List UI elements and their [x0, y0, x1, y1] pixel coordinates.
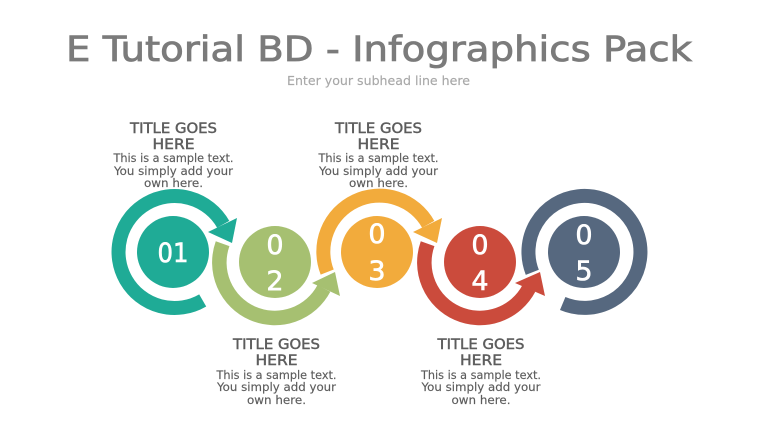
text block: step 4: This is a sample text. [420, 368, 541, 382]
step 5: slate ring and number: 5 [575, 256, 593, 287]
text block: step 1: own here. [144, 176, 203, 190]
text block: step 3: HERE [358, 137, 400, 153]
text block: step 4: HERE [460, 353, 502, 369]
text block: step 3: You simply add your [318, 164, 438, 178]
subhead: Enter your subhead line here [287, 73, 470, 88]
text block: step 3: own here. [349, 176, 408, 190]
step 4: red ring arrow and number: 0 [471, 230, 489, 261]
text block: step 2: own here. [247, 393, 306, 407]
text block: step 3 [318, 121, 438, 190]
text block: step 1: This is a sample text. [113, 151, 234, 165]
text block: step 1: HERE [152, 137, 194, 153]
step 3: orange ring arrow and number: 0 [368, 219, 386, 250]
text block: step 2: You simply add your [216, 380, 336, 394]
text block: step 1: You simply add your [113, 164, 233, 178]
text block: step 3: This is a sample text. [318, 151, 438, 165]
text block: step 4: You simply add your [420, 380, 541, 394]
text block: step 4: own here. [452, 393, 510, 407]
step 5: slate ring and number: 0 [575, 220, 593, 251]
title: E Tutorial BD - Infographics Pack [66, 30, 693, 70]
text block: step 2: HERE [256, 353, 298, 369]
text block: step 2 [216, 337, 336, 407]
step 4: red ring arrow and number [424, 226, 545, 318]
step 5: slate ring and number [528, 196, 640, 308]
text block: step 4: TITLE GOES [436, 337, 525, 353]
text block: step 2: This is a sample text. [216, 368, 336, 382]
step 1: teal ring arrow and number: 01 [158, 238, 188, 269]
text block: step 1 [113, 121, 234, 190]
step 2: green ring arrow and number: 2 [266, 266, 284, 297]
step 3: orange ring arrow and number [323, 196, 442, 288]
step 3: orange ring arrow and number: 3 [368, 256, 386, 287]
text block: step 2: TITLE GOES [232, 337, 320, 353]
step 2: green ring arrow and number [219, 226, 340, 318]
text block: step 4 [420, 337, 541, 407]
step 1: teal ring arrow and number [119, 196, 237, 308]
step 4: red ring arrow and number: 4 [471, 266, 489, 297]
text block: step 3: TITLE GOES [334, 121, 422, 137]
step 2: green ring arrow and number: 0 [266, 230, 284, 261]
text block: step 1: TITLE GOES [129, 121, 217, 137]
